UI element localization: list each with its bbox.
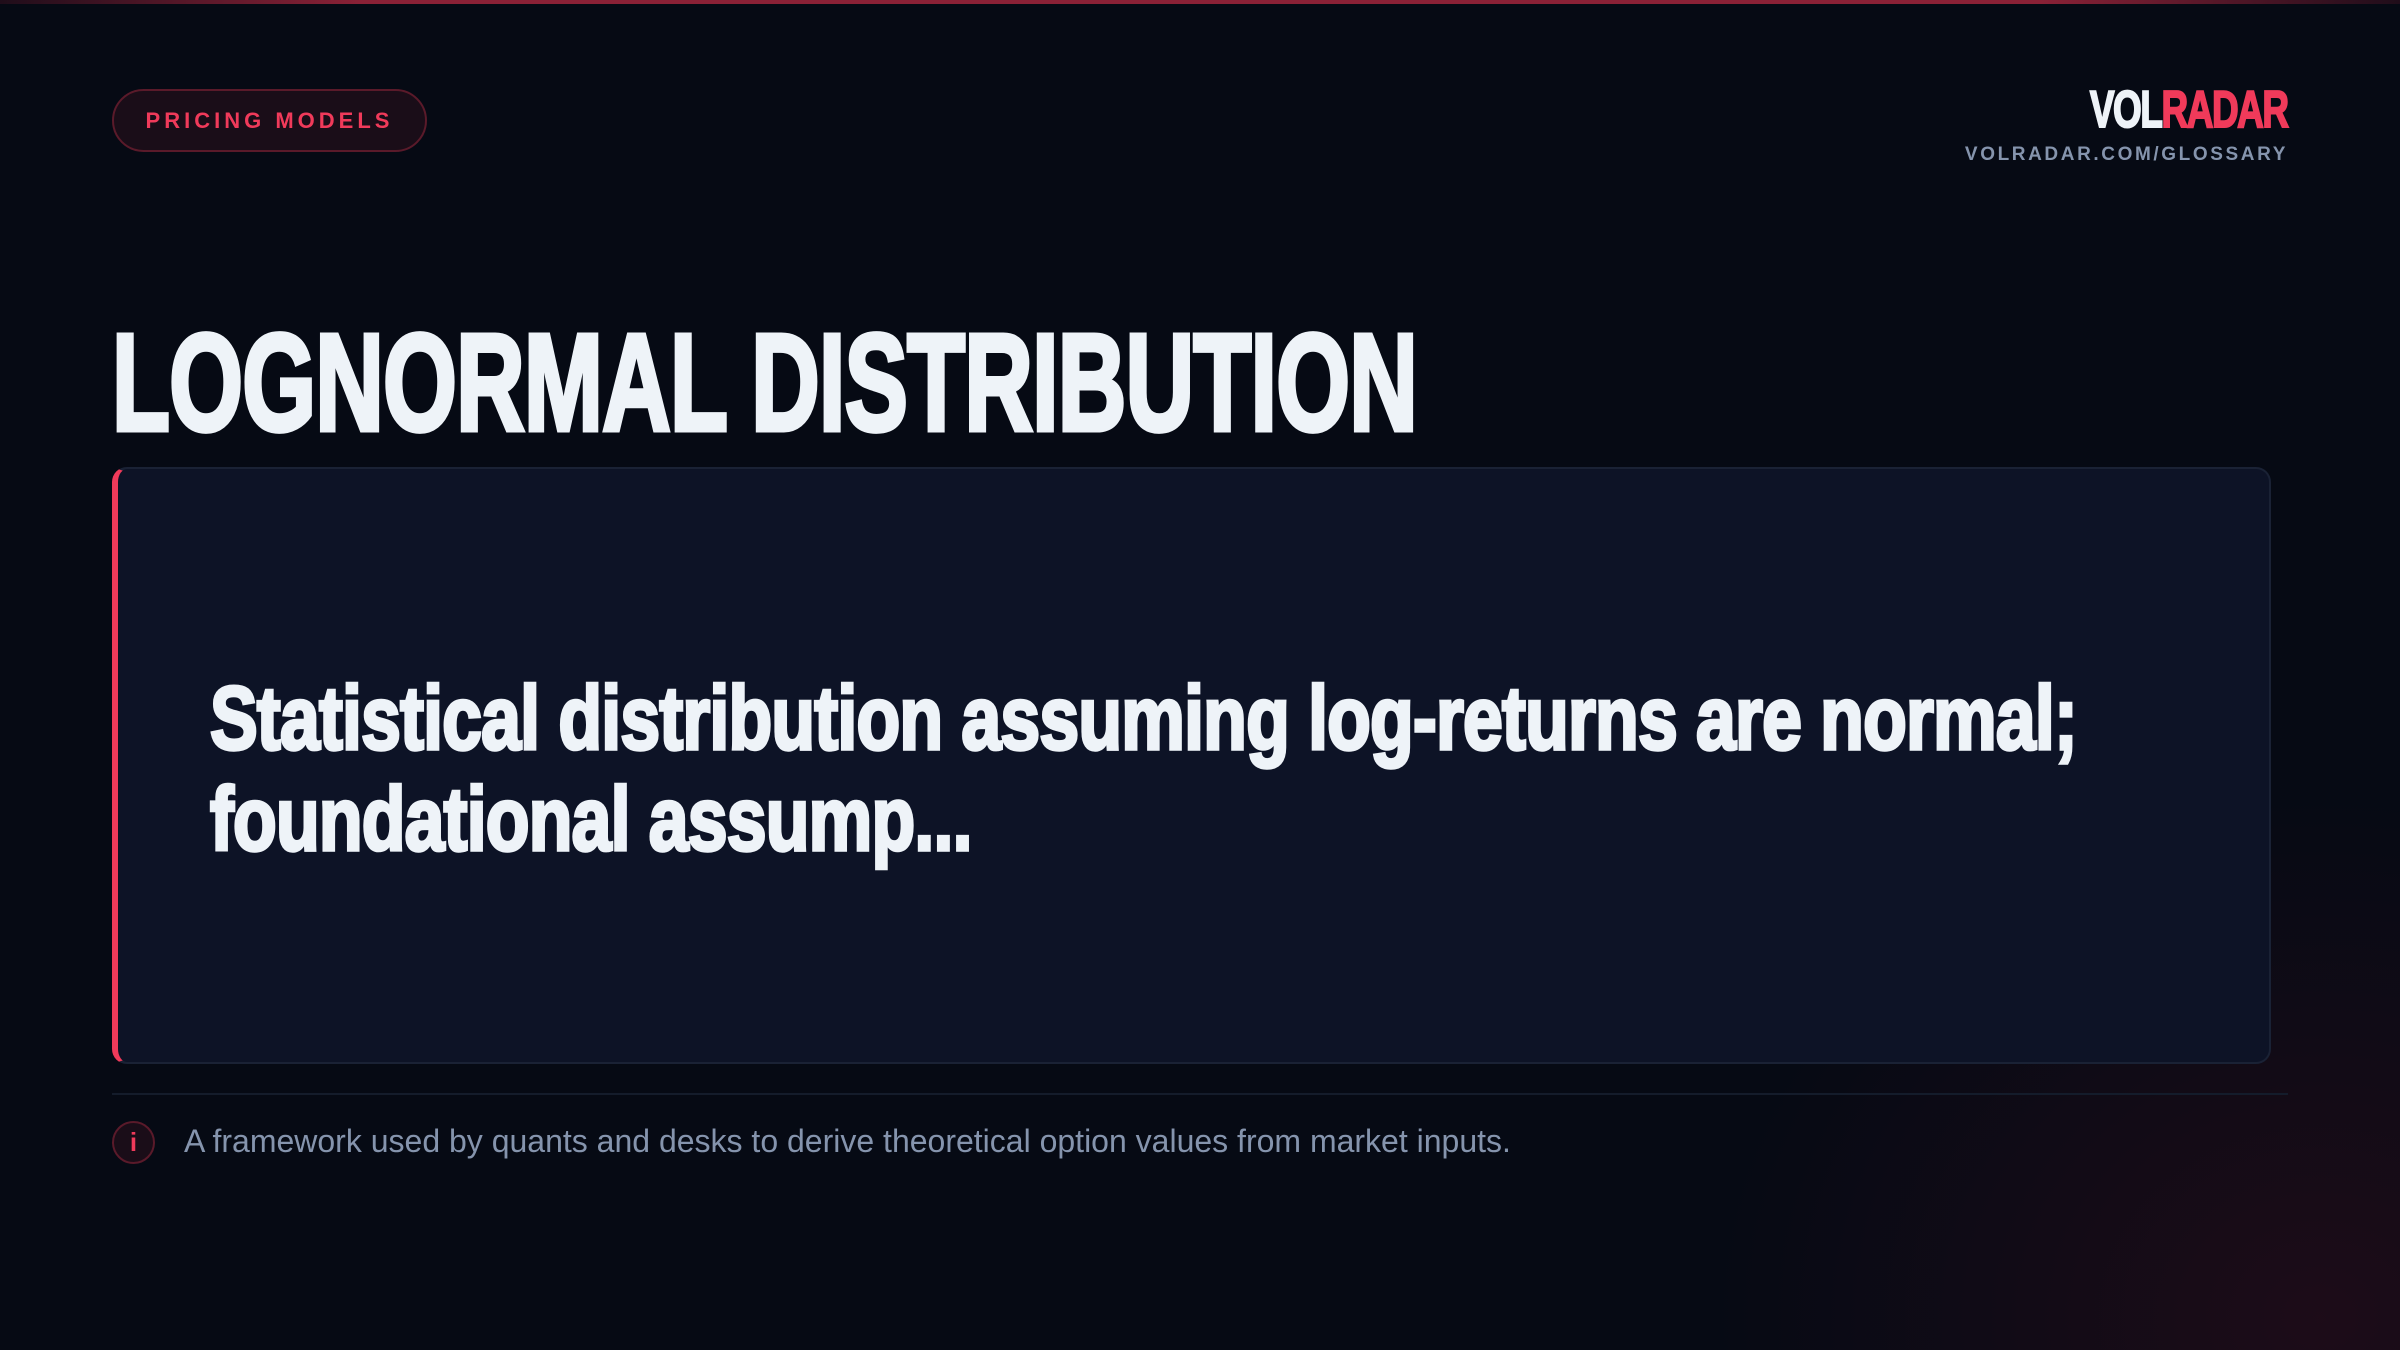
logo: VOLRADAR — [2090, 81, 2288, 139]
title: LOGNORMAL DISTRIBUTION — [112, 306, 1417, 460]
icon: info — [112, 1121, 155, 1164]
panel: definition card — [112, 467, 2271, 1064]
url: VOLRADAR.COM/GLOSSARY — [1965, 144, 2288, 165]
definition text: foundational assump... — [210, 770, 972, 870]
category pill: PRICING MODELS — [146, 108, 393, 132]
definition text: Statistical distribution assuming log-returns are normal; — [210, 669, 2077, 769]
definition text — [210, 669, 2077, 870]
category pill — [112, 89, 427, 152]
icon: info: i — [130, 1127, 137, 1157]
footnote text: A framework used by quants and desks to derive theoretical option values from market inputs. — [184, 1123, 1511, 1159]
